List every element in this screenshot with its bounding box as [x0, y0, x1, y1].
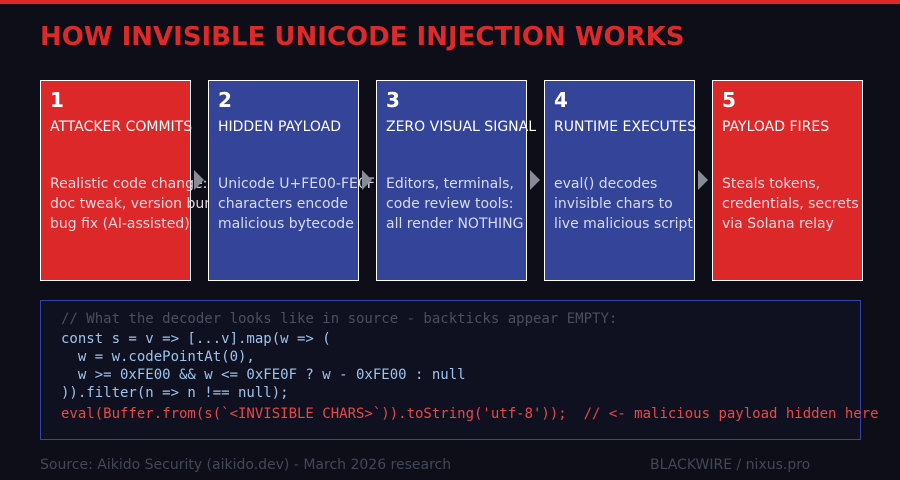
panel: step 1: [40, 80, 227, 280]
panel: step 3: code review tools:: [386, 196, 513, 212]
panel: step 3: 3: [386, 88, 400, 112]
panel: step 2: characters encode: [218, 196, 348, 212]
title: HOW INVISIBLE UNICODE INJECTION WORKS: [40, 22, 684, 52]
panel: step 4: invisible chars to: [554, 196, 673, 212]
panel: step 3: all render NOTHING: [386, 216, 523, 232]
panel: step 2: Unicode U+FE00-FE0F: [218, 176, 375, 192]
panel: step 1: doc tweak, version bump: [50, 196, 227, 212]
panel: step 5: Steals tokens,: [722, 176, 820, 192]
code panel: w = w.codePointAt(0),: [61, 349, 255, 365]
panel: step 4: 4: [554, 88, 568, 112]
panel: step 1: bug fix (AI-assisted): [50, 216, 190, 232]
arrow 3: [530, 170, 540, 190]
footer: brand: BLACKWIRE / nixus.pro: [650, 457, 810, 473]
panel: step 4: live malicious script: [554, 216, 693, 232]
code panel: [40, 300, 879, 440]
code panel: )).filter(n => n !== null);: [61, 385, 289, 401]
panel: step 5: PAYLOAD FIRES: [722, 119, 829, 135]
panel: step 4: RUNTIME EXECUTES: [554, 119, 696, 135]
panel: step 1: 1: [50, 88, 64, 112]
panel: step 2: [208, 80, 375, 280]
panel: step 3: Editors, terminals,: [386, 176, 514, 192]
panel: step 5: [712, 80, 862, 280]
panel: step 1: ATTACKER COMMITS: [50, 119, 192, 135]
code panel: // What the decoder looks like in source - backticks appear EMPTY:: [61, 311, 617, 327]
arrow 4: [698, 170, 708, 190]
panel: step 4: eval() decodes: [554, 176, 657, 192]
panel: step 2: malicious bytecode: [218, 216, 354, 232]
panel: step 4: [544, 80, 696, 280]
panel: step 1: Realistic code change:: [50, 176, 207, 192]
panel: step 2: HIDDEN PAYLOAD: [218, 119, 341, 135]
arrow 2: [362, 170, 372, 190]
panel: step 3: ZERO VISUAL SIGNAL: [386, 119, 536, 135]
panel: step 3: [376, 80, 536, 280]
arrow 1: [194, 170, 204, 190]
code panel: eval(Buffer.from(s(`<INVISIBLE CHARS>`)).toString('utf-8')); // <- malicious payload hidden here: [61, 406, 879, 422]
panel: step 2: 2: [218, 88, 232, 112]
footer: source: Source: Aikido Security (aikido.dev) - March 2026 research: [40, 457, 451, 473]
code panel: w >= 0xFE00 && w <= 0xFE0F ? w - 0xFE00 : null: [61, 367, 466, 383]
panel: step 5: 5: [722, 88, 736, 112]
panel: step 5: credentials, secrets: [722, 196, 859, 212]
panel: step 5: via Solana relay: [722, 216, 834, 232]
code panel: const s = v => [...v].map(w => (: [61, 331, 331, 347]
